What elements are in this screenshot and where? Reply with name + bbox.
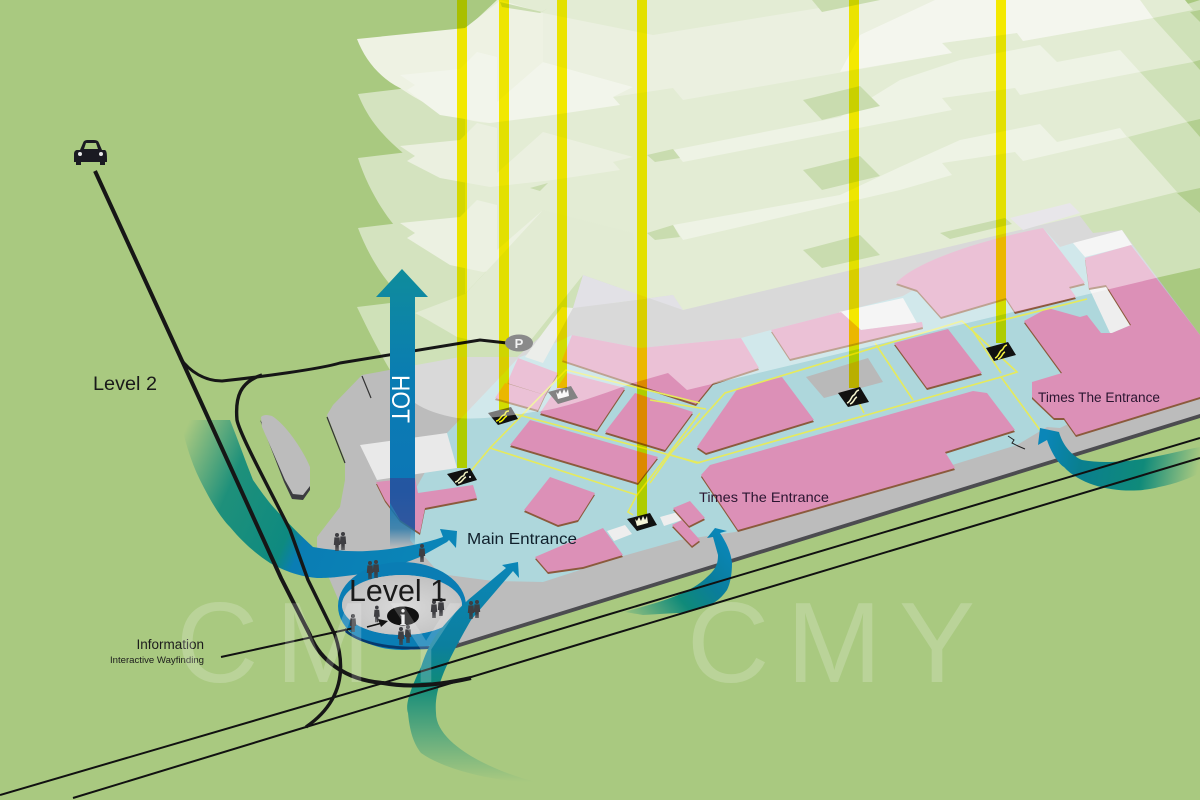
- store overlap tint: [390, 478, 415, 530]
- white service block: [360, 433, 457, 480]
- label: Information: Information: [136, 637, 204, 652]
- icon: escalator, centre: [838, 387, 869, 407]
- people silhouettes: [334, 532, 480, 645]
- lavender corner block: [1010, 203, 1080, 230]
- step notch: [1008, 436, 1025, 449]
- left slab edges: [327, 376, 371, 463]
- overlap zone level 3: [400, 200, 633, 272]
- HOT label: HOT: [386, 375, 414, 423]
- information arrow: [367, 619, 388, 627]
- main road: [95, 171, 471, 685]
- sub-label: Interactive Wayfinding: Interactive Wayfinding: [110, 655, 204, 666]
- flow arrow: entrance right: [1038, 428, 1200, 491]
- icon: escalator, entrance left: [447, 468, 477, 486]
- wayfinding poles: [457, 0, 1006, 516]
- icon: escalator, upper: [488, 407, 518, 425]
- car icon: [74, 140, 107, 165]
- right edge gaps: [1177, 10, 1200, 213]
- pale floor over green near parking: [415, 210, 640, 345]
- main floor wash: [465, 0, 1193, 310]
- flow arrow: entrance centre: [625, 528, 732, 615]
- icon: escalator, right: [986, 342, 1016, 361]
- flow arrow: level 1 entrance: [407, 562, 536, 782]
- wayfinding paths: [470, 299, 1087, 515]
- translucent first ghost floor: [357, 0, 1200, 419]
- information leader line: [221, 628, 354, 657]
- parking branch: [180, 340, 507, 381]
- information icon: i: [400, 605, 407, 630]
- HOT arrow: [376, 269, 428, 548]
- ghost upper floors: [357, 0, 1200, 419]
- lighter band level 2: [673, 45, 1140, 162]
- ground slab edge: [453, 412, 1200, 649]
- white diagonal block: [525, 307, 573, 363]
- lighter band level 3: [673, 124, 1127, 240]
- top floor highlight: [840, 0, 1153, 72]
- label: Level 2: Level 2: [93, 373, 157, 395]
- level 1 ring: [338, 562, 466, 650]
- label: Level 1: Level 1: [349, 573, 447, 608]
- retail stores: [376, 228, 1200, 572]
- parking marker: P: [515, 336, 524, 351]
- highways: [0, 438, 1200, 798]
- ghost wing top level: [357, 0, 543, 123]
- left gray island edge: [260, 420, 310, 500]
- icon: lift, concourse: [627, 513, 657, 531]
- overlap zone level 2: [400, 123, 633, 187]
- flow arrow: main entrance: [180, 420, 457, 578]
- watermark: CMY: CMY: [176, 580, 464, 707]
- parking marker: [505, 334, 533, 352]
- icon: lift, upper: [548, 386, 578, 404]
- information icon: [387, 605, 419, 630]
- watermark: CMY: [176, 580, 975, 707]
- ghost floor voids: [500, 0, 1012, 271]
- overlap zone level 1: [400, 52, 633, 123]
- ring lower shadow: [345, 628, 460, 649]
- walkway floor: [410, 228, 1200, 582]
- central gray block: [806, 358, 883, 398]
- top floor wash: [543, 0, 1153, 100]
- label: Information: [110, 637, 204, 666]
- left gray island top: [261, 415, 310, 495]
- ghost wing level 4: [358, 214, 465, 336]
- watermark: CMY right: CMY: [687, 580, 975, 707]
- gray ground slab: [317, 203, 1200, 650]
- loop road: [237, 375, 341, 727]
- label: Times The Entrance centre: Times The Entrance: [699, 489, 829, 505]
- ghost wing level 3: [358, 144, 465, 268]
- level 1 information zone: [342, 575, 462, 635]
- access roads: [95, 171, 507, 727]
- label: Times The Entrance right: Times The Entrance: [1038, 390, 1160, 405]
- lavender slab corner near parking: [573, 275, 683, 310]
- white service blocks upper: [607, 230, 1132, 541]
- label: Main Entrance: Main Entrance: [467, 531, 577, 548]
- ghost wing level 2: [358, 80, 465, 184]
- ground floor plan: [260, 203, 1200, 650]
